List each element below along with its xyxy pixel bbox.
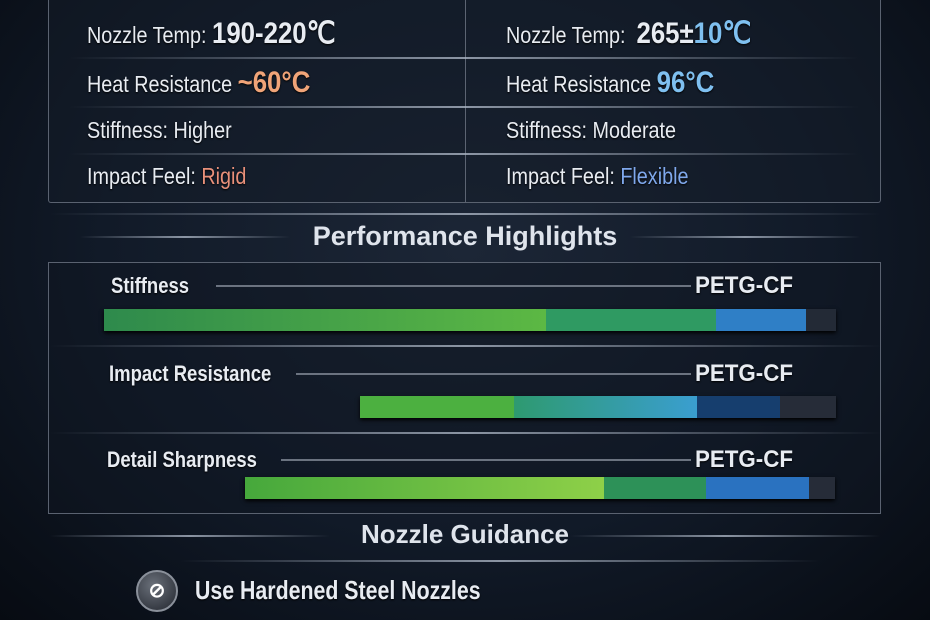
left row: stiffness: Stiffness: Higher	[87, 117, 232, 143]
heading: nozzle guidance: Nozzle Guidance	[361, 519, 569, 549]
row: detail sharpness: PETG-CF	[695, 446, 793, 473]
bar	[104, 309, 836, 331]
row: detail sharpness: Detail Sharpness	[107, 447, 257, 472]
row: stiffness: Stiffness	[111, 273, 189, 298]
right row: stiffness: Stiffness: Moderate	[506, 117, 676, 143]
left row: heat resistance: Heat Resistance ~60°C	[87, 66, 310, 99]
left row: nozzle temp: Nozzle Temp: 190-220℃	[87, 17, 336, 50]
bar	[245, 477, 835, 499]
row: impact resistance: Impact Resistance	[109, 361, 271, 386]
right row: impact feel: Impact Feel: Flexible	[506, 163, 688, 189]
right row: heat resistance: Heat Resistance 96°C	[506, 66, 714, 99]
row: stiffness: PETG-CF	[695, 272, 793, 299]
panel: performance bars	[48, 262, 881, 514]
icon: nozzle	[136, 570, 178, 612]
panel: material comparison	[48, 0, 881, 203]
column divider	[465, 0, 466, 202]
bar	[360, 396, 836, 418]
heading: performance highlights: Performance Highlights	[313, 221, 617, 251]
row: impact resistance	[109, 360, 838, 422]
row: stiffness	[102, 272, 838, 335]
guidance text: Use Hardened Steel Nozzles	[195, 575, 481, 605]
left row: impact feel: Impact Feel: Rigid	[87, 163, 246, 189]
row: detail sharpness	[107, 446, 836, 502]
right row: nozzle temp: Nozzle Temp: 265±10℃	[506, 17, 751, 50]
icon: nozzle: ⊘	[149, 580, 165, 602]
row: impact resistance: PETG-CF	[695, 360, 793, 387]
